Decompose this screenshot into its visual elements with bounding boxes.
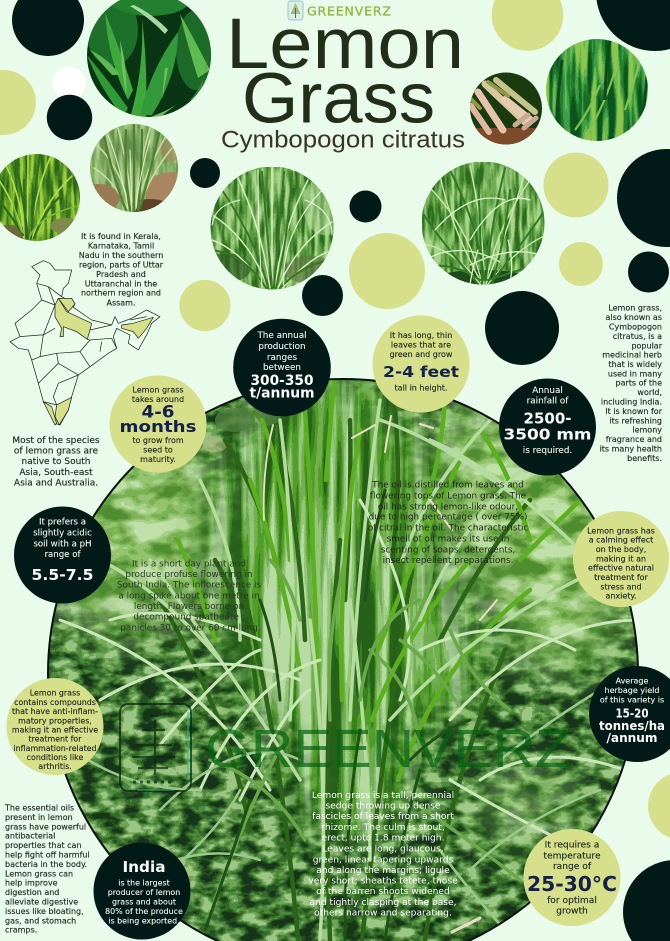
callout: annual production: between	[263, 363, 301, 373]
callout: India producer: is the largest	[118, 879, 170, 888]
callout: rainfall: 3500 mm	[504, 426, 592, 444]
callout: calming effect: making it an	[596, 554, 646, 563]
text: native range: Asia, South-east	[19, 468, 93, 478]
callout: temperature: growth	[556, 907, 588, 917]
text: antibacterial benefits	[4, 804, 90, 935]
text: distribution in India	[79, 232, 164, 307]
text: about lemon grass: its refreshing	[609, 416, 662, 425]
callout: temperature: for optimal	[547, 896, 597, 906]
text: distribution in India: region, parts of Uttar	[79, 260, 164, 269]
text: about lemon grass: fragrance and	[606, 435, 662, 444]
callout: annual production	[233, 319, 331, 416]
text: native range	[12, 436, 100, 488]
callout: leaf height: It has long, thin	[390, 331, 452, 340]
text: essential oil: insect repellent preparations.	[383, 556, 513, 566]
text: antibacterial benefits: issues like bloating,	[5, 907, 84, 916]
text: essential oil: of citral in the oil. The characteristic	[368, 524, 528, 534]
photo: lemon grass field left	[0, 154, 82, 243]
callout: soil pH: It prefers a	[39, 518, 86, 528]
callout: annual production: production	[258, 342, 306, 352]
callout: time to maturity: months	[120, 417, 196, 436]
callout: anti-inflammatory: matory properties,	[18, 716, 92, 725]
map of India	[10, 261, 160, 425]
text: about lemon grass: its many health	[600, 444, 662, 453]
text: distribution in India: Karnataka, Tamil	[88, 241, 154, 250]
text: antibacterial benefits: help improve	[5, 879, 58, 888]
callout: herbage yield	[589, 666, 670, 762]
callout: soil pH: soil with a pH	[33, 539, 92, 549]
callout: anti-inflammatory: treatment for	[29, 735, 82, 744]
text: about lemon grass: parts of the	[616, 379, 662, 388]
logo badge	[288, 1, 303, 20]
callout: herbage yield: herbage yield	[605, 686, 659, 695]
text: about lemon grass: world,	[637, 388, 662, 397]
text: flowering: a long spike about one metre in	[118, 591, 260, 601]
text: about lemon grass: also known as	[605, 313, 662, 322]
text: about lemon grass: Lemon grass,	[608, 304, 662, 313]
text: plant description: Lemon grass is a tall, perennial	[312, 791, 454, 801]
photo: main lemon grass illustration	[40, 370, 650, 941]
text: antibacterial benefits: Lemon grass can	[5, 869, 73, 878]
text: essential oil: smell of oil makes its use in	[387, 535, 509, 545]
text: essential oil: oil has strong lemon-like odour,	[378, 502, 518, 512]
text: native range: native to South	[21, 457, 91, 467]
text: about lemon grass: that is widely	[609, 360, 662, 369]
callout: soil pH	[14, 506, 111, 604]
callout: anti-inflammatory: that have anti-inflam-	[12, 707, 98, 716]
callout: anti-inflammatory: conditions like	[27, 753, 83, 762]
text: distribution in India: Assam.	[106, 298, 136, 307]
callout: annual production: t/annum	[250, 386, 314, 402]
text: antibacterial benefits: grass have powerful	[5, 822, 86, 831]
watermark wordmark: GREENVERZ	[205, 719, 571, 779]
text: plant description: of the barren shoots widened	[316, 887, 450, 897]
text: about lemon grass: medicinal herb	[602, 351, 662, 360]
text: antibacterial benefits: gas, and stomach	[5, 916, 76, 925]
text: plant description	[308, 791, 458, 919]
callout: calming effect: a calming effect	[589, 535, 653, 544]
callout: soil pH: slightly acidic	[33, 529, 92, 539]
text: plant description: and tightly clasping at the base,	[310, 898, 456, 908]
text: about lemon grass: It is known for	[605, 407, 663, 416]
photo: lemon grass bush right	[422, 162, 546, 290]
callout: time to maturity: maturity.	[140, 455, 176, 464]
callout: calming effect: effective natural	[588, 564, 654, 573]
callout: calming effect: stress and	[600, 582, 642, 591]
text: native range: of lemon grass are	[14, 446, 99, 456]
text: plant description: rhizome. The culm is stout,	[321, 823, 445, 833]
text: antibacterial benefits: help fight off harmful	[5, 850, 90, 859]
callout: time to maturity: takes around	[132, 395, 184, 404]
callout: temperature: It requires a	[545, 841, 599, 851]
text: about lemon grass: lemony	[632, 426, 662, 435]
photo: lemon grass clump on soil	[90, 124, 178, 212]
title: Lemon	[226, 5, 464, 84]
text: about lemon grass: citratus, is a	[613, 332, 662, 341]
callout: soil pH: range of	[44, 550, 81, 560]
text: essential oil: flowering tops of Lemon grass. The	[370, 491, 526, 501]
text: flowering: South India. The inflorescence is	[117, 581, 261, 591]
text: antibacterial benefits: The essential oils	[4, 804, 74, 813]
text: plant description: others narrow and separating.	[314, 909, 452, 919]
callout: rainfall: Annual	[532, 386, 563, 396]
text: essential oil: The oil is distilled from leaves and	[371, 480, 524, 490]
callout: anti-inflammatory	[6, 678, 104, 775]
callout: anti-inflammatory: inflammation-related	[13, 744, 97, 753]
callout: time to maturity: Lemon grass	[132, 385, 184, 394]
text: native range: Most of the species	[12, 436, 100, 446]
text: flowering: length. Flowers borne on	[134, 602, 244, 612]
text: plant description: and along the margins; ligule	[316, 866, 450, 876]
callout: calming effect	[573, 511, 669, 607]
callout: rainfall: 2500-	[524, 410, 572, 428]
text: distribution in India: Uttaranchal in the	[85, 279, 157, 288]
title	[226, 5, 464, 138]
callout: temperature	[524, 829, 620, 926]
callout: India producer: producer of lemon	[108, 888, 180, 897]
callout: temperature: temperature	[543, 851, 601, 861]
text: about lemon grass: popular	[631, 341, 663, 350]
callout: anti-inflammatory: arthritis.	[38, 762, 72, 771]
photo: lemon grass bush centre	[210, 166, 334, 290]
text: distribution in India: Nadu in the southern	[79, 251, 163, 260]
text: essential oil: due to high percentage ( over 75%)	[369, 513, 527, 523]
subtitle: Cymbopogon citratus	[221, 126, 465, 154]
callout: annual production: 300-350	[250, 373, 314, 389]
text: about lemon grass	[600, 304, 663, 463]
text: distribution in India: It is found in Kerala,	[81, 232, 161, 241]
photo: cut lemongrass stalks	[470, 72, 542, 146]
callout: anti-inflammatory: contains compounds	[14, 698, 96, 707]
callout: time to maturity: seed to	[143, 446, 173, 455]
callout: India producer: is being exported.	[108, 916, 180, 925]
watermark logo	[120, 704, 571, 791]
callout: India producer: India	[122, 858, 166, 876]
text: plant description: erect, upto 1.8 meter high.	[322, 834, 444, 844]
pale stems	[264, 416, 497, 932]
text: antibacterial benefits: digestion and	[5, 888, 59, 897]
text: about lemon grass: used in many	[608, 369, 662, 378]
callout: anti-inflammatory: Lemon grass	[30, 689, 80, 698]
text: distribution in India: Pradesh and	[96, 270, 146, 279]
callout: leaf height: leaves that are	[391, 341, 451, 350]
callout: soil pH: 5.5-7.5	[32, 566, 94, 584]
text: plant description: Leaves are long, glaucous,	[322, 845, 444, 855]
callout: annual production: ranges	[267, 353, 297, 363]
text: about lemon grass: Cymbopogon	[609, 323, 662, 332]
callout: anti-inflammatory: making it an effective	[12, 726, 98, 735]
callout: calming effect: Lemon grass has	[587, 526, 655, 535]
text: antibacterial benefits: cramps.	[5, 926, 37, 935]
callout: rainfall	[499, 378, 596, 476]
watermark tree badge	[120, 704, 191, 791]
text: plant description: sedge throwing up dense	[325, 801, 441, 811]
callout: India producer: 80% of the produce	[105, 907, 183, 916]
callout: leaf height	[372, 316, 470, 412]
photo: lemon grass leaves close-up	[86, 0, 216, 118]
text: plant description: very short; sheaths tetete, those	[308, 876, 458, 886]
callout: leaf height: 2-4 feet	[383, 363, 460, 381]
callout: India producer	[94, 842, 190, 940]
text: antibacterial benefits: antibacterial	[5, 832, 55, 841]
text: native range: Asia and Australia.	[14, 478, 98, 488]
callout: temperature: 25-30°C	[527, 872, 617, 896]
callout: rainfall: is required.	[523, 446, 572, 456]
callout: herbage yield: of this variety is	[600, 696, 664, 705]
text: antibacterial benefits: present in lemon	[5, 813, 73, 822]
callout: annual production: The annual	[256, 331, 307, 341]
text: about lemon grass: benefits.	[627, 454, 662, 463]
text: flowering: It is a short day plant and	[132, 559, 246, 569]
text: plant description: green, linear tapering upwards	[313, 855, 454, 865]
text: flowering	[117, 559, 261, 634]
text: flowering: produce profuse flowering in	[125, 570, 253, 580]
text: essential oil	[368, 480, 528, 566]
logo wordmark: GREENVERZ	[307, 4, 391, 18]
callout: time to maturity	[110, 376, 206, 472]
callout: herbage yield: /annum	[606, 730, 658, 745]
long grass blades	[60, 380, 640, 940]
callout: calming effect: on the body,	[596, 545, 646, 554]
text: antibacterial benefits: bacteria in the body.	[5, 860, 87, 869]
highlighted states	[43, 298, 153, 425]
title: Grass	[242, 60, 435, 138]
callout: India producer: grass and about	[112, 898, 176, 907]
text: essential oil: scenting of soaps, detergents,	[381, 545, 515, 555]
callout: calming effect: treatment for	[594, 573, 649, 582]
top dark mottling	[203, 408, 280, 452]
callout: time to maturity: to grow from	[132, 436, 184, 445]
photo: lemon grass blades top right	[546, 39, 648, 141]
logo	[288, 1, 391, 20]
callout: leaf height: tall in height.	[395, 384, 447, 393]
callout: leaf height: green and grow	[390, 350, 453, 359]
callout: herbage yield: 15-20	[616, 706, 649, 720]
callout: herbage yield: Average	[616, 677, 648, 686]
text: flowering: decompound spatheate ;	[133, 613, 245, 623]
text: plant description: fascicles of leaves from a short	[312, 812, 454, 822]
callout: time to maturity: 4-6	[142, 402, 174, 422]
text: about lemon grass: including India.	[601, 398, 662, 407]
text: flowering: panicles 30 to over 60 cm long	[120, 624, 258, 634]
callout: temperature: range of	[553, 862, 592, 872]
callout: herbage yield: tonnes/ha	[599, 718, 665, 733]
callout: rainfall: rainfall of	[527, 396, 569, 406]
text: distribution in India: northern region and	[81, 289, 161, 298]
callout: calming effect: anxiety.	[605, 592, 637, 601]
text: antibacterial benefits: properties that can	[5, 841, 82, 850]
text: antibacterial benefits: alleviate digestive	[5, 898, 78, 907]
